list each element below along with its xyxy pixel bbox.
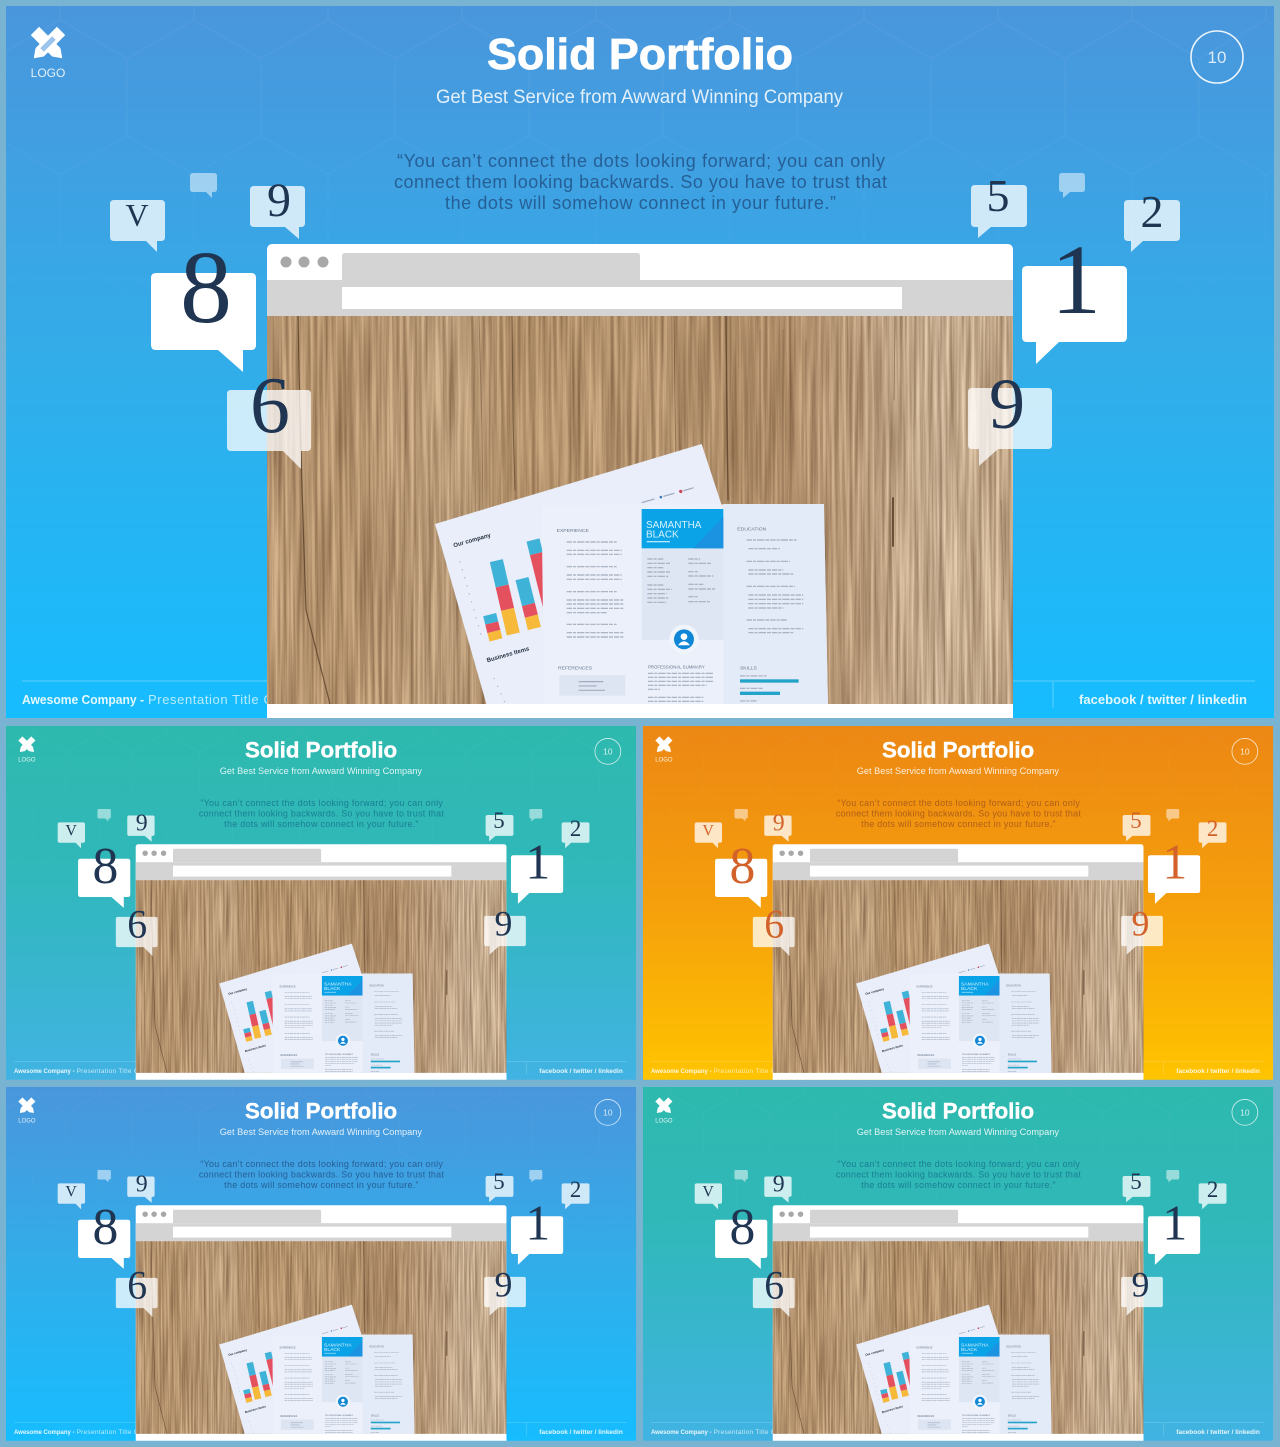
footer: Presentation Title Goes Here: [77, 1068, 168, 1075]
speech bubble: 2: [562, 820, 590, 848]
browser window with photo: [773, 844, 1143, 1080]
footer: Awesome Company -: [22, 692, 144, 707]
speech bubble: 2: [1199, 1177, 1226, 1209]
icon: crossed pencils logo: [30, 27, 66, 80]
icon: crossed pencils logo: [18, 736, 36, 763]
quote text block: [199, 798, 444, 829]
page number badge: 10: [1240, 1107, 1250, 1117]
speech bubble: 5: 5: [986, 170, 1010, 221]
page number badge: 10: [1208, 48, 1226, 67]
footer: Presentation Title Goes Here: [714, 1068, 805, 1075]
speech bubble: 8: [715, 1199, 767, 1269]
title: Solid Portfolio: [245, 1098, 397, 1123]
speech bubble: 9 right: 9: [495, 904, 512, 944]
speech bubble: 1: [1022, 247, 1127, 364]
speech bubble: 8: [715, 838, 767, 908]
footer: [14, 1061, 627, 1075]
quote text block: the dots will somehow connect in your future.”: [224, 819, 419, 829]
title: Solid Portfolio: [882, 737, 1034, 762]
footer: Presentation Title Goes Here: [77, 1429, 168, 1436]
subtitle: Get Best Service from Awward Winning Company: [857, 766, 1059, 777]
footer: Awesome Company -: [651, 1068, 712, 1075]
page number badge: [595, 738, 621, 764]
quote text block: the dots will somehow connect in your future.”: [224, 1180, 419, 1190]
speech bubble: 2: 2: [570, 1177, 581, 1202]
quote text block: connect them looking backwards. So you have to trust that: [199, 1169, 444, 1179]
speech bubble: 6: [753, 1264, 795, 1317]
quote text block: [199, 1159, 444, 1190]
speech bubble: 6: [753, 903, 795, 956]
speech bubble: 9 top left: 9: [136, 810, 148, 836]
speech bubble: 2: [1124, 196, 1180, 252]
speech bubble: V: [58, 1183, 85, 1209]
icon: crossed pencils logo: [18, 1097, 36, 1124]
speech bubble: 9 right: [484, 912, 526, 954]
speech bubble: 5: [486, 1169, 513, 1202]
speech bubble: 1: [1148, 835, 1200, 904]
quote text block: “You can’t connect the dots looking forward; you can only: [200, 1159, 443, 1169]
page number badge: 10: [1240, 746, 1250, 756]
panel: main blue slide: [6, 6, 1274, 718]
quote text block: the dots will somehow connect in your future.”: [861, 1180, 1056, 1190]
speech bubble: 9 right: [484, 1265, 526, 1316]
icon: crossed pencils logo: [655, 1097, 673, 1124]
speech bubble: V: [58, 822, 85, 848]
speech bubble: 9 top left: 9: [136, 1171, 148, 1197]
speech bubble: 9 top left: [250, 184, 305, 239]
quote text block: connect them looking backwards. So you have to trust that: [199, 808, 444, 818]
speech bubble: 1: [1148, 1196, 1200, 1265]
speech bubble: 6: 6: [250, 362, 290, 450]
speech bubble: V: V: [65, 822, 77, 839]
speech bubble: 6: 6: [127, 903, 147, 947]
speech bubble: 9 top left: 9: [773, 810, 785, 836]
browser window with photo: [136, 1205, 506, 1441]
speech bubble: 8: 8: [180, 230, 232, 345]
speech bubble: 8: 8: [92, 1199, 118, 1256]
speech bubble: 9 top left: [764, 1171, 792, 1203]
title: Solid Portfolio: [882, 1098, 1034, 1123]
title: Solid Portfolio: [245, 737, 397, 762]
footer: facebook / twitter / linkedin: [1079, 692, 1247, 707]
icon: crossed pencils logo: [655, 736, 673, 763]
speech bubble: 1: 1: [1162, 835, 1187, 890]
speech bubble: V: [695, 1183, 722, 1209]
speech bubble: 2: 2: [570, 816, 581, 841]
speech bubble: 5: [1123, 1169, 1150, 1202]
speech bubble: small right: [1166, 809, 1179, 821]
footer: Presentation Title Goes Here: [148, 692, 332, 707]
speech bubble: small left: [734, 809, 748, 821]
speech bubble: 1: 1: [525, 1196, 550, 1251]
quote text block: [394, 151, 887, 213]
speech bubble: V: V: [702, 1183, 714, 1200]
speech bubble: 1: 1: [525, 835, 550, 890]
speech bubble: small right: [529, 1170, 542, 1182]
speech bubble: 5: [486, 812, 514, 842]
speech bubble: 8: [151, 253, 256, 372]
speech bubble: small left: [734, 1170, 748, 1182]
speech bubble: 9 right: [1121, 904, 1163, 955]
speech bubble: 6: 6: [764, 1264, 784, 1308]
speech bubble: 6: [116, 1264, 158, 1317]
page number badge: 10: [603, 746, 613, 756]
footer: [22, 681, 1255, 708]
speech bubble: small right: [529, 809, 542, 821]
speech bubble: small right: [1059, 173, 1085, 198]
quote text block: the dots will somehow connect in your future.”: [861, 819, 1056, 829]
speech bubble: 5: 5: [493, 1169, 505, 1194]
speech bubble: 8: [78, 1199, 130, 1269]
speech bubble: 9 right: [968, 380, 1052, 466]
speech bubble: V: [695, 822, 722, 848]
speech bubble: 1: [511, 1196, 563, 1265]
quote text block: [836, 1159, 1081, 1190]
subtitle: Get Best Service from Awward Winning Company: [857, 1127, 1059, 1138]
quote text block: [836, 798, 1081, 829]
speech bubble: 6: [227, 378, 311, 469]
speech bubble: 2: 2: [1140, 186, 1164, 237]
speech bubble: 6: 6: [127, 1264, 147, 1308]
footer: [651, 1422, 1264, 1436]
speech bubble: 9 top left: [127, 814, 155, 842]
speech bubble: V: V: [65, 1183, 77, 1200]
quote text block: “You can’t connect the dots looking forward; you can only: [837, 1159, 1080, 1169]
browser window with photo: [773, 1205, 1143, 1441]
speech bubble: 8: 8: [729, 1199, 755, 1256]
quote text block: “You can’t connect the dots looking forward; you can only: [837, 798, 1080, 808]
footer: Awesome Company -: [651, 1429, 712, 1436]
quote text block: the dots will somehow connect in your future.”: [445, 193, 836, 213]
speech bubble: 9 right: 9: [1132, 1265, 1149, 1305]
footer: facebook / twitter / linkedin: [1176, 1429, 1260, 1436]
speech bubble: 9 right: 9: [1132, 904, 1149, 944]
title: Solid Portfolio: [487, 30, 793, 79]
speech bubble: 9 top left: 9: [267, 174, 291, 227]
speech bubble: 8: 8: [729, 838, 755, 895]
speech bubble: 9 right: 9: [495, 1265, 512, 1305]
speech bubble: 2: [562, 1177, 589, 1209]
speech bubble: 5: 5: [1130, 1169, 1142, 1194]
subtitle: Get Best Service from Awward Winning Company: [220, 1127, 422, 1138]
footer: [651, 1061, 1264, 1075]
quote text block: “You can’t connect the dots looking forward; you can only: [397, 151, 885, 171]
quote text block: connect them looking backwards. So you have to trust that: [394, 172, 887, 192]
speech bubble: 5: [1123, 808, 1150, 841]
speech bubble: 1: [510, 846, 564, 904]
icon: crossed pencils logo: LOGO: [655, 757, 673, 763]
footer: facebook / twitter / linkedin: [539, 1429, 623, 1436]
subtitle: Get Best Service from Awward Winning Company: [220, 766, 422, 777]
speech bubble: 5: 5: [493, 808, 505, 833]
page number badge: [1191, 31, 1243, 83]
speech bubble: V: V: [702, 822, 714, 839]
icon: crossed pencils logo: LOGO: [18, 757, 36, 763]
page number badge: [1232, 1099, 1258, 1125]
speech bubble: 5: [971, 181, 1027, 238]
speech bubble: 6: 6: [764, 903, 784, 947]
icon: crossed pencils logo: LOGO: [31, 66, 65, 80]
quote text block: connect them looking backwards. So you have to trust that: [836, 808, 1081, 818]
speech bubble: 9 right: [1121, 1265, 1163, 1316]
speech bubble: 9 top left: [764, 810, 792, 842]
footer: facebook / twitter / linkedin: [1176, 1068, 1260, 1075]
speech bubble: V: V: [125, 197, 149, 233]
footer: Awesome Company -: [14, 1429, 75, 1436]
browser window with photo: [136, 844, 506, 1080]
subtitle: Get Best Service from Awward Winning Company: [436, 87, 843, 108]
panel: teal slide thumbnail 2: [643, 1087, 1273, 1441]
icon: crossed pencils logo: LOGO: [655, 1118, 673, 1124]
page number badge: 10: [603, 1107, 613, 1117]
footer: Awesome Company -: [14, 1068, 75, 1075]
speech bubble: 2: 2: [1207, 816, 1218, 841]
speech bubble: 5: 5: [1130, 808, 1142, 833]
panel: teal slide thumbnail: [6, 726, 636, 1080]
speech bubble: 1: 1: [1162, 1196, 1187, 1251]
speech bubble: V: [110, 197, 165, 252]
speech bubble: 9 top left: [127, 1171, 155, 1203]
speech bubble: 8: [78, 848, 130, 908]
speech bubble: 1: 1: [1051, 224, 1101, 335]
speech bubble: small left: [97, 1170, 111, 1182]
speech bubble: small right: [1166, 1170, 1179, 1182]
speech bubble: 9 top left: 9: [773, 1171, 785, 1197]
speech bubble: 6: [116, 910, 158, 956]
icon: crossed pencils logo: LOGO: [18, 1118, 36, 1124]
footer: facebook / twitter / linkedin: [539, 1068, 623, 1075]
footer: [14, 1422, 627, 1436]
footer: Presentation Title Goes Here: [714, 1429, 805, 1436]
page number badge: [1232, 738, 1258, 764]
panel: orange slide thumbnail: [643, 726, 1273, 1080]
panel: blue slide thumbnail: [6, 1087, 636, 1441]
speech bubble: small left: [97, 809, 111, 821]
quote text block: “You can’t connect the dots looking forward; you can only: [200, 798, 443, 808]
speech bubble: 8: 8: [92, 838, 118, 895]
speech bubble: 2: 2: [1207, 1177, 1218, 1202]
speech bubble: 9 right: 9: [989, 364, 1025, 444]
page number badge: [595, 1099, 621, 1125]
quote text block: connect them looking backwards. So you have to trust that: [836, 1169, 1081, 1179]
browser window with photo: [267, 244, 1013, 718]
speech bubble: small left: [190, 173, 217, 198]
speech bubble: 2: [1199, 816, 1226, 848]
